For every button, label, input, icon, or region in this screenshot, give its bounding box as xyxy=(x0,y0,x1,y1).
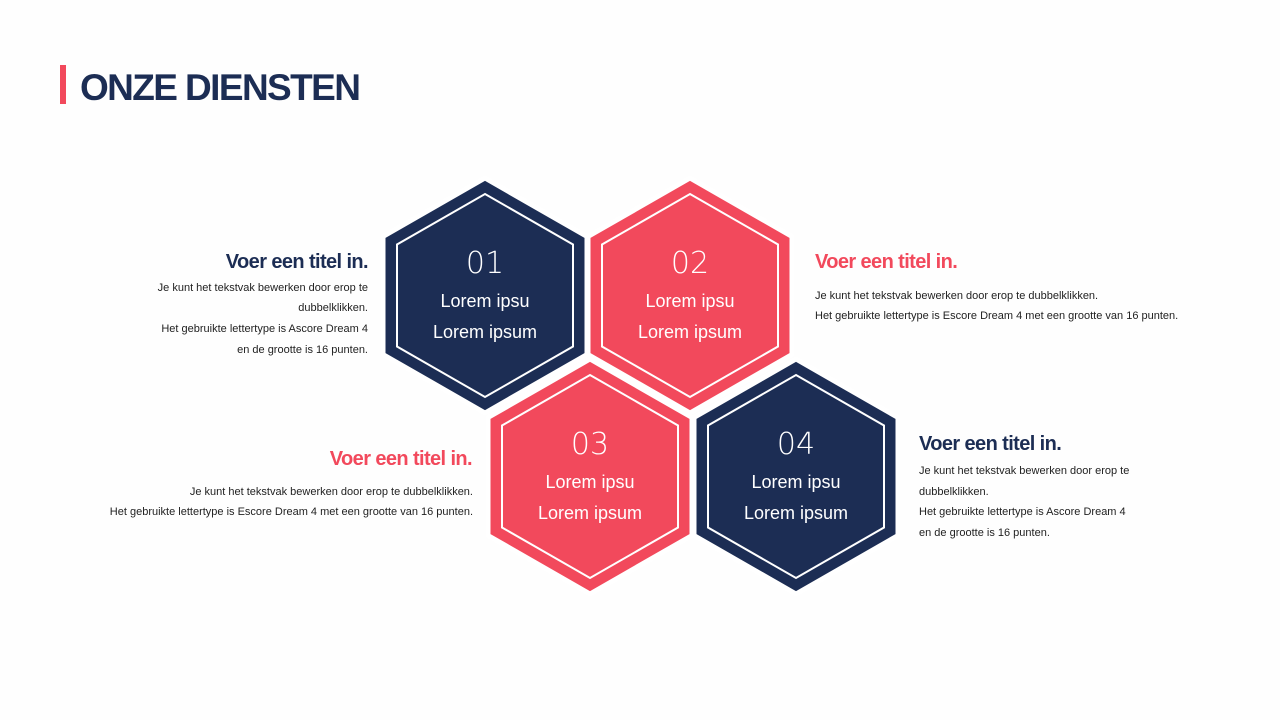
text block 2: Voer een titel in. xyxy=(815,251,957,273)
hexagon 03 xyxy=(488,359,692,594)
hexagon 01 xyxy=(383,178,587,413)
text block 4: Je kunt het tekstvak bewerken door erop te xyxy=(919,465,1129,477)
text block 3: Het gebruikte lettertype is Escore Dream 4 met een grootte van 16 punten. xyxy=(110,506,473,518)
hexagon 04: Lorem ipsu xyxy=(751,472,841,492)
hexagon 02: Lorem ipsu xyxy=(645,291,735,311)
text block 1: Voer een titel in. xyxy=(226,251,368,273)
hexagon 04: Lorem ipsum xyxy=(744,503,848,523)
hexagon 02: 02 xyxy=(671,246,709,281)
hexagon 01: Lorem ipsu xyxy=(440,291,530,311)
hexagon 01: 01 xyxy=(466,246,504,281)
text block 4: Het gebruikte lettertype is Ascore Dream 4 xyxy=(919,506,1126,518)
text block 1: en de grootte is 16 punten. xyxy=(237,344,368,356)
hexagon 03: 03 xyxy=(571,427,609,462)
hexagon 01: Lorem ipsum xyxy=(433,322,537,342)
text block 1: Je kunt het tekstvak bewerken door erop te xyxy=(158,282,368,294)
text block 4 xyxy=(919,433,1129,539)
text block 3: Voer een titel in. xyxy=(330,448,472,470)
text block 4: en de grootte is 16 punten. xyxy=(919,527,1050,539)
title: ONZE DIENSTEN xyxy=(80,67,359,108)
hexagon 02: Lorem ipsum xyxy=(638,322,742,342)
text block 1: Het gebruikte lettertype is Ascore Dream 4 xyxy=(161,323,368,335)
hexagon 02 xyxy=(588,178,792,413)
text block 4: Voer een titel in. xyxy=(919,433,1061,455)
text block 1: dubbelklikken. xyxy=(298,302,368,314)
text block 3 xyxy=(110,448,473,518)
text block 2: Je kunt het tekstvak bewerken door erop te dubbelklikken. xyxy=(815,290,1098,302)
hexagon 04: 04 xyxy=(777,427,815,462)
text block 2 xyxy=(815,251,1178,322)
hexagon 03: Lorem ipsu xyxy=(545,472,635,492)
hexagon 04 xyxy=(694,359,898,594)
hexagon 03: Lorem ipsum xyxy=(538,503,642,523)
text block 1 xyxy=(158,251,368,356)
text block 3: Je kunt het tekstvak bewerken door erop te dubbelklikken. xyxy=(190,486,473,498)
text block 4: dubbelklikken. xyxy=(919,486,989,498)
text block 2: Het gebruikte lettertype is Escore Dream 4 met een grootte van 16 punten. xyxy=(815,310,1178,322)
